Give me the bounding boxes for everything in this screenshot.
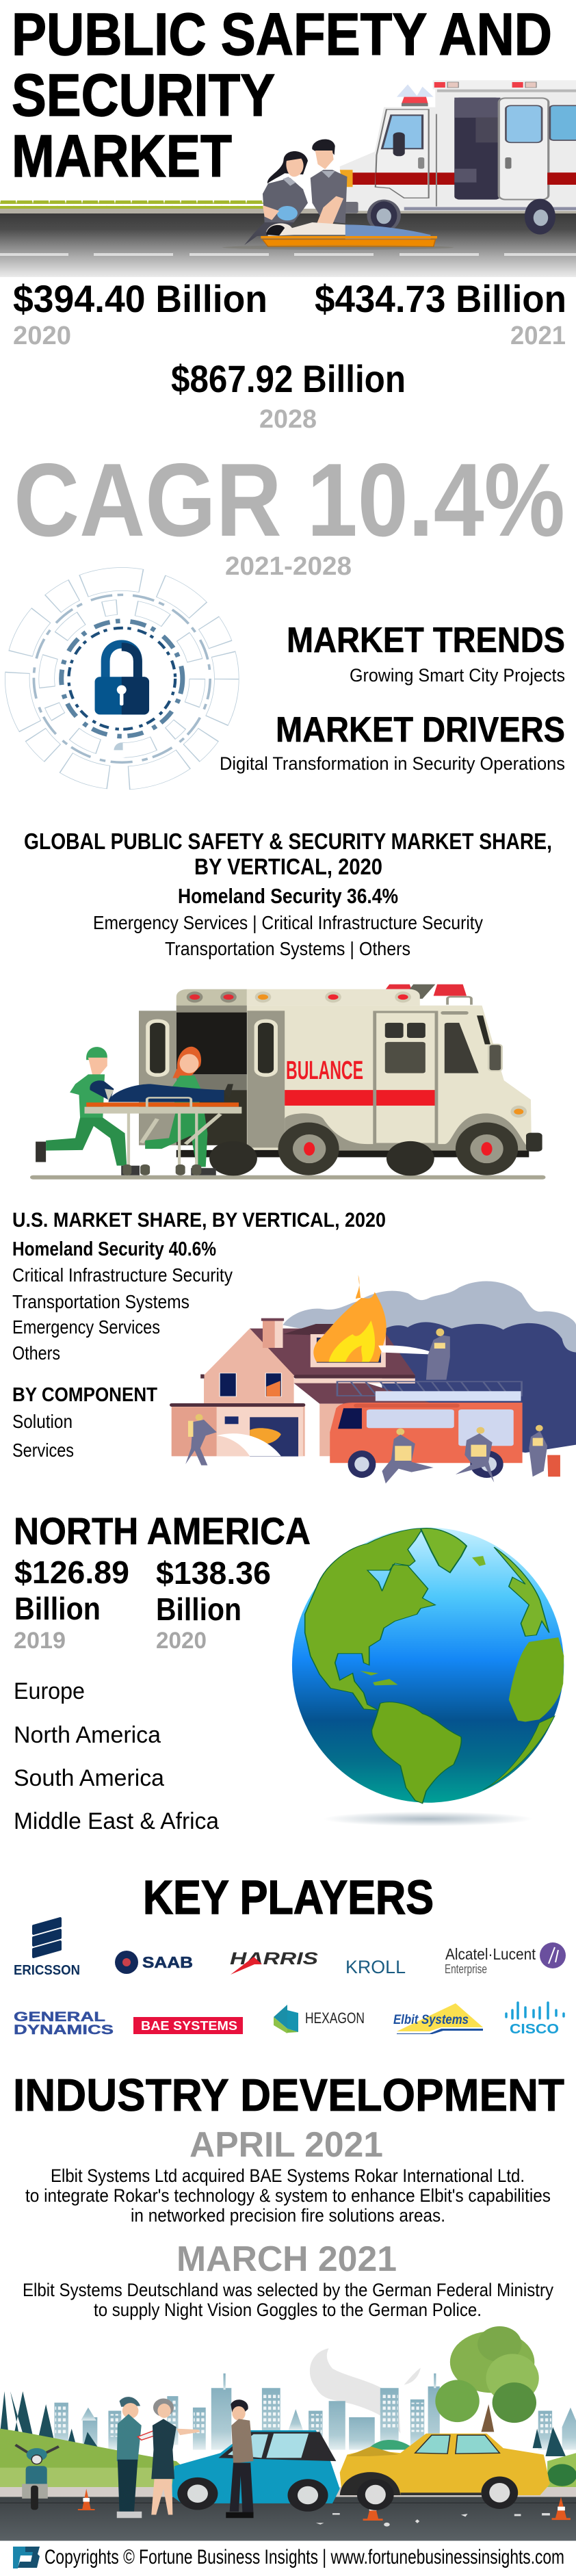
US share list: Others <box>12 1342 60 1364</box>
stat: 2019: Billion <box>14 1591 101 1626</box>
stat: 2020: $394.40 Billion <box>13 277 267 320</box>
europe <box>494 1547 549 1636</box>
heading: key players: KEY PLAYERS <box>143 1871 434 1924</box>
logo: Alcatel-Lucent <box>445 1942 566 1976</box>
north america <box>305 1528 435 1710</box>
ambulance lettering: BULANCE <box>286 1056 363 1085</box>
debris on road <box>316 2513 550 2527</box>
stat: 2019 <box>14 1554 129 1654</box>
illustration: house fire <box>170 1275 576 1483</box>
skyline <box>54 2373 576 2449</box>
medic: man <box>311 140 347 226</box>
US share list: Emergency Services <box>12 1316 160 1338</box>
motorcycle <box>16 2445 59 2510</box>
US share list <box>12 1238 233 1364</box>
logo: Harris: HARRIS <box>230 1949 318 1968</box>
logo: General Dynamics: GENERAL <box>14 2010 106 2025</box>
smoke <box>310 2348 400 2434</box>
global share list <box>93 884 483 959</box>
blue car <box>171 2430 340 2512</box>
logo: Saab <box>115 1951 193 1974</box>
medic: woman <box>244 151 308 245</box>
logo: Hexagon <box>274 2005 365 2033</box>
logo: Fortune Business Insights <box>13 2547 40 2568</box>
pine trees <box>0 2391 566 2456</box>
logo: Elbit Systems: Elbit Systems <box>393 2013 469 2027</box>
by component <box>12 1384 157 1461</box>
logo: General Dynamics <box>14 2010 114 2038</box>
logo: Hexagon: HEXAGON <box>305 2009 365 2027</box>
stat: 2019: 2019 <box>14 1628 66 1654</box>
logo: Cisco <box>506 2003 564 2037</box>
logo: Alcatel-Lucent: Alcatel·Lucent <box>445 1945 536 1963</box>
man on phone <box>226 2399 254 2518</box>
title: SECURITY <box>12 62 275 129</box>
market trends: Growing Smart City Projects <box>350 665 565 686</box>
logo: Cisco: CISCO <box>510 2022 559 2037</box>
hero illustration: ambulance <box>222 80 576 250</box>
stat: 2019: $126.89 <box>14 1554 129 1590</box>
regions list: North America <box>14 1722 161 1748</box>
market drivers <box>220 710 565 774</box>
illustration: ambulance with stretcher <box>30 985 545 1180</box>
stat: 2028: $867.92 Billion <box>171 357 406 400</box>
logo: Ericsson <box>14 1918 80 1978</box>
heading: global share: BY VERTICAL, 2020 <box>194 854 382 879</box>
logo: Harris <box>230 1949 318 1975</box>
woman paramedic <box>145 1047 216 1175</box>
title <box>12 1 552 190</box>
logo: Kroll: KROLL <box>345 1957 406 1977</box>
stat: 2020: Billion <box>156 1591 241 1627</box>
stat: 2020 <box>13 277 267 350</box>
fire truck <box>330 1391 523 1478</box>
patient and stretcher <box>85 1080 241 1175</box>
man paramedic <box>36 1047 140 1175</box>
woman witness <box>151 2398 200 2515</box>
regions list: Middle East & Africa <box>14 1808 219 1834</box>
development: April 2021: in networked precision fire solutions areas. <box>131 2205 445 2226</box>
police officer <box>117 2397 161 2518</box>
logo: BAE Systems: BAE SYSTEMS <box>141 2019 237 2033</box>
development: April 2021 <box>25 2125 551 2226</box>
heading: US share: U.S. MARKET SHARE, BY VERTICAL, 2020 <box>12 1209 386 1232</box>
global share list: Transportation Systems | Others <box>165 938 410 959</box>
south america <box>371 1702 461 1804</box>
stat: 2021: 2021 <box>510 322 566 350</box>
regions list: Europe <box>14 1678 85 1704</box>
regions list <box>14 1678 219 1834</box>
heading: global share <box>24 829 552 879</box>
house <box>170 1318 434 1457</box>
stat: 2021: $434.73 Billion <box>315 277 566 320</box>
development: March 2021: MARCH 2021 <box>176 2239 397 2279</box>
greenland <box>421 1528 467 1572</box>
by component: Solution <box>12 1411 73 1432</box>
by component: BY COMPONENT <box>12 1384 157 1406</box>
global share list: Homeland Security 36.4% <box>178 884 398 908</box>
logo: Alcatel-Lucent: Enterprise <box>445 1962 487 1976</box>
globe <box>292 1528 564 1826</box>
icon: digital padlock <box>17 579 226 778</box>
market drivers: Digital Transformation in Security Operations <box>220 753 565 774</box>
CAGR: 2021-2028 <box>225 552 352 581</box>
stat: 2020 <box>156 1555 271 1654</box>
stat: 2028 <box>171 357 406 434</box>
regions list: South America <box>14 1765 164 1791</box>
flames <box>313 1275 387 1362</box>
development: March 2021 <box>23 2239 553 2320</box>
footer <box>13 2546 564 2568</box>
logo: General Dynamics: DYNAMICS <box>14 2023 114 2038</box>
market trends <box>287 621 565 686</box>
logo: Saab: SAAB <box>142 1953 193 1971</box>
logos <box>14 1918 566 2038</box>
patient on stretcher <box>222 222 454 250</box>
by component: Services <box>12 1440 74 1461</box>
caribbean <box>360 1671 398 1685</box>
ladder <box>337 1381 522 1396</box>
stat: 2020: 2020 <box>156 1628 207 1654</box>
global share list: Emergency Services | Critical Infrastructure Security <box>93 912 483 933</box>
development: March 2021: to supply Night Vision Goggles to the German Police. <box>94 2300 482 2320</box>
stat: 2021 <box>315 277 566 350</box>
tree <box>435 2326 539 2432</box>
logo: BAE Systems <box>133 2017 243 2034</box>
development: April 2021: Elbit Systems Ltd acquired BAE Systems Rokar International Ltd. <box>51 2165 525 2186</box>
US share list: Critical Infrastructure Security <box>12 1264 233 1286</box>
logo: Ericsson: ERICSSON <box>14 1963 80 1978</box>
yellow car <box>340 2434 550 2510</box>
title: MARKET <box>12 123 232 190</box>
development: April 2021: APRIL 2021 <box>189 2125 383 2165</box>
illustration: car accident scene <box>0 2326 576 2541</box>
traffic cones <box>78 2489 571 2521</box>
heading: North America: NORTH AMERICA <box>14 1509 311 1552</box>
US share list: Homeland Security 40.6% <box>12 1238 216 1260</box>
US share list: Transportation Systems <box>12 1291 189 1312</box>
logo: Elbit Systems <box>393 2003 483 2034</box>
hero: road and grass <box>0 200 576 277</box>
stat: 2020: $138.36 <box>156 1555 271 1591</box>
stat: 2020: 2020 <box>13 322 71 350</box>
firefighters <box>185 1329 547 1483</box>
africa <box>509 1637 564 1721</box>
stat: 2028: 2028 <box>259 405 317 434</box>
hills and ground <box>0 2429 206 2487</box>
